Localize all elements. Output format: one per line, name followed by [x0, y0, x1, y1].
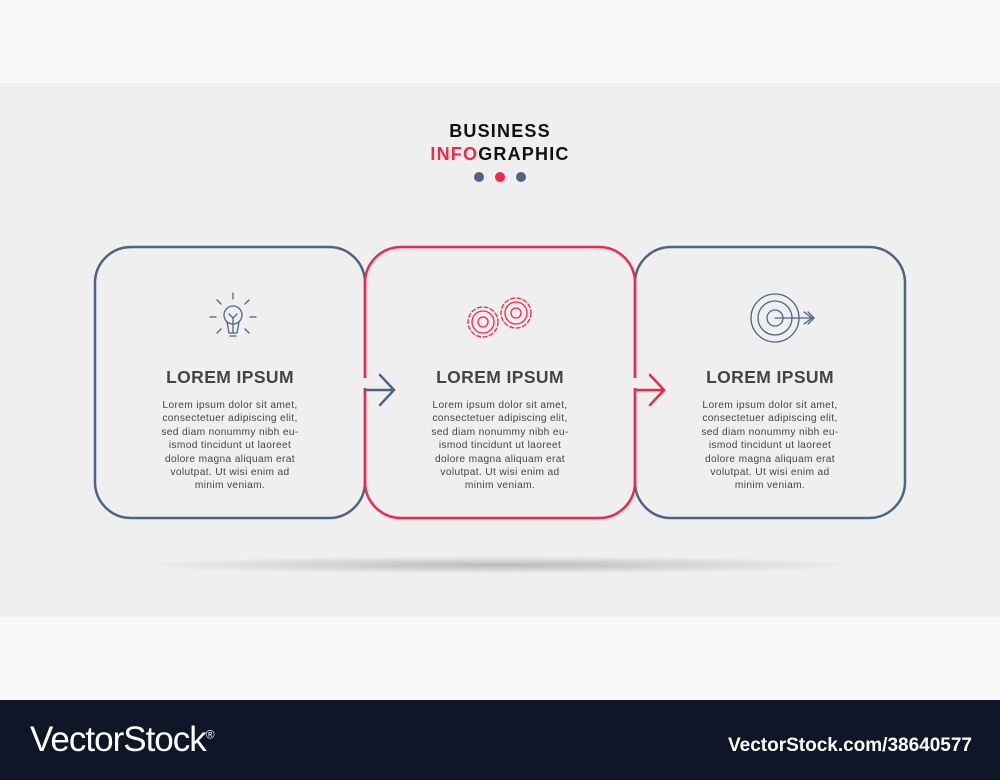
panel: box 1 [95, 247, 365, 518]
text: minim veniam. [195, 480, 265, 491]
text: box 2: LOREM IPSUM [436, 367, 564, 387]
text: dolore magna aliquam erat [165, 454, 295, 465]
panel: box 3 [635, 247, 905, 518]
text: ismod tincidunt ut laoreet [709, 440, 831, 451]
title [430, 121, 570, 164]
dots [474, 172, 526, 182]
title: INFOGRAPHIC [430, 144, 570, 164]
text: minim veniam. [465, 480, 535, 491]
text: consectetuer adipiscing elit, [432, 413, 568, 424]
title: BUSINESS [449, 121, 551, 141]
text: Lorem ipsum dolor sit amet, [702, 400, 838, 411]
text: sed diam nonummy nibh eu- [701, 427, 839, 438]
icon: lightbulb [210, 293, 256, 336]
text: volutpat. Ut wisi enim ad [170, 467, 290, 478]
footer [0, 700, 1000, 780]
text: box 3: LOREM IPSUM [706, 367, 834, 387]
arrow 1 [365, 375, 394, 405]
icon: gears [468, 298, 531, 337]
text: sed diam nonummy nibh eu- [431, 427, 569, 438]
text: sed diam nonummy nibh eu- [161, 427, 299, 438]
text: consectetuer adipiscing elit, [702, 413, 838, 424]
panel: box 2 [365, 247, 635, 518]
text: consectetuer adipiscing elit, [162, 413, 298, 424]
text: volutpat. Ut wisi enim ad [440, 467, 560, 478]
shadow [130, 556, 870, 574]
text: dolore magna aliquam erat [705, 454, 835, 465]
icon: target [751, 294, 814, 342]
text: ismod tincidunt ut laoreet [169, 440, 291, 451]
arrow 2 [635, 375, 664, 405]
text: minim veniam. [735, 480, 805, 491]
footer: VectorStock® [30, 720, 214, 759]
text: Lorem ipsum dolor sit amet, [162, 400, 298, 411]
text: box 1: LOREM IPSUM [166, 367, 294, 387]
text: dolore magna aliquam erat [435, 454, 565, 465]
text: Lorem ipsum dolor sit amet, [432, 400, 568, 411]
text: volutpat. Ut wisi enim ad [710, 467, 830, 478]
text: ismod tincidunt ut laoreet [439, 440, 561, 451]
footer: VectorStock.com/38640577 [728, 735, 972, 756]
